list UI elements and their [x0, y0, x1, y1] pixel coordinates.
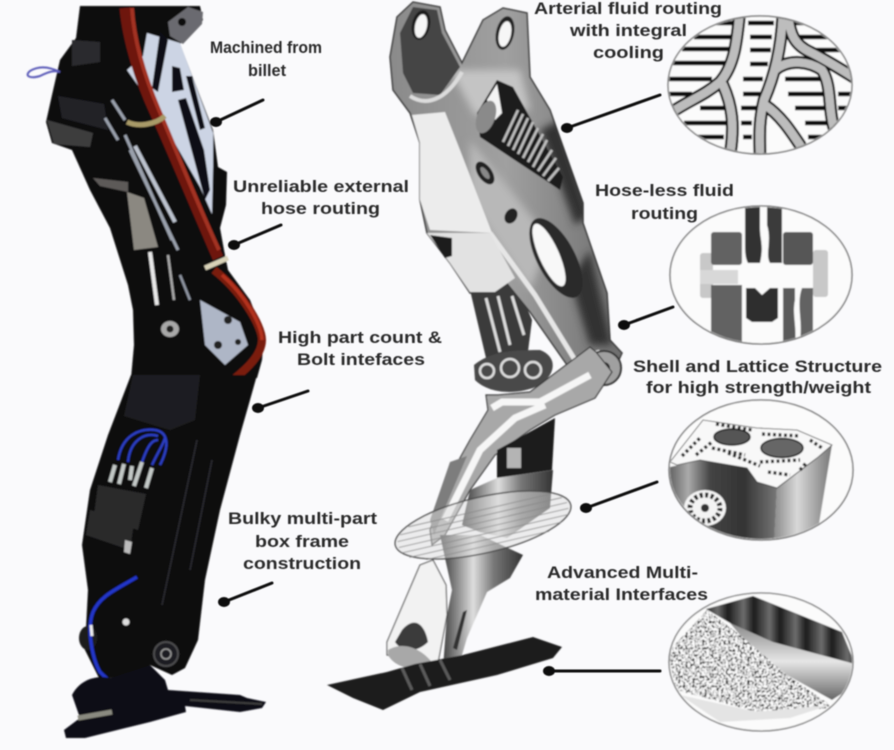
- lower white wedge: [387, 560, 447, 668]
- label: bulky multi-part box frame construction: box frame: [255, 533, 349, 551]
- soft pencil shading: [450, 70, 612, 345]
- small openings: [472, 158, 498, 188]
- label: high part count and bolt interfaces: High part count &: [278, 329, 442, 347]
- silver plate: [127, 33, 213, 214]
- detail: advanced multi-material interfaces: [668, 593, 855, 731]
- femur inner edge highlight: [490, 233, 600, 360]
- lower window: [519, 210, 593, 306]
- blue cable: [90, 577, 137, 712]
- ankle joint: [154, 642, 178, 666]
- valve blocks: [711, 232, 742, 265]
- tubular channels: [714, 429, 750, 445]
- label: arterial fluid routing: [534, 0, 722, 62]
- label: machined from billet: billet: [248, 62, 286, 80]
- light surface of femur: [412, 112, 492, 233]
- label: hose-less fluid routing: Hose-less fluid: [595, 182, 734, 200]
- label: hose-less fluid routing: routing: [631, 205, 698, 223]
- carbon fibre layer: [706, 596, 855, 664]
- horizontal coolant stripes: [668, 23, 853, 137]
- upper leg frame: [46, 6, 264, 378]
- smooth interface band: [730, 623, 855, 700]
- porous material: [668, 610, 835, 712]
- label: high part count and bolt interfaces: [278, 329, 442, 369]
- hose clamps: [127, 116, 165, 125]
- label: advanced multi-material interfaces: Advanced Multi-: [547, 564, 698, 582]
- right leg: additively manufactured leg drawing: [327, 2, 622, 710]
- label: machined from billet: Machined from: [210, 39, 322, 57]
- lower leg box frame: [80, 375, 257, 680]
- label: bulky multi-part box frame construction: construction: [243, 555, 361, 573]
- label: shell and lattice structure: Shell and Lattice Structure: [633, 358, 882, 376]
- shell side faces: [666, 460, 777, 545]
- knee hub: [587, 351, 621, 385]
- piston rods: [150, 252, 157, 305]
- label: high part count and bolt interfaces: Bolt intefaces: [297, 351, 425, 369]
- dark top socket: [400, 7, 460, 95]
- label: unreliable external hose routing: hose routing: [261, 200, 380, 218]
- label: unreliable external hose routing: [233, 178, 409, 218]
- underside block: [427, 233, 515, 292]
- actuator mechanism: [497, 418, 555, 478]
- lattice pores: [682, 424, 822, 475]
- label: arterial fluid routing: with integral: [569, 22, 687, 40]
- label: bulky multi-part box frame construction: Bulky multi-part: [228, 510, 378, 528]
- blue wires: [118, 430, 166, 465]
- artery branches: [672, 16, 852, 154]
- silver linkage rods: [105, 100, 178, 250]
- lower shaded edge: [680, 695, 830, 722]
- access window: [97, 417, 170, 488]
- silver connectors: [110, 462, 152, 488]
- plate slots: [152, 32, 210, 200]
- upper mounting holes: [409, 8, 433, 42]
- foot: [64, 665, 266, 738]
- actuator box: [462, 470, 553, 538]
- detail: arterial fluid routing: [668, 10, 858, 160]
- rear thigh fin: [430, 456, 467, 535]
- femur body: [390, 2, 622, 388]
- label: machined from billet: [210, 39, 322, 80]
- top lattice plate: [670, 420, 832, 488]
- knee arm: [430, 347, 612, 545]
- label: arterial fluid routing: Arterial fluid routing: [534, 0, 722, 18]
- foot blade: [327, 637, 562, 710]
- hatched section plane: [389, 477, 577, 573]
- grey actuator block: [127, 192, 158, 250]
- cooling ribs: [503, 110, 559, 181]
- detail: shell and lattice structure: [666, 400, 853, 545]
- knee struts behind femur: [470, 280, 532, 375]
- left leg: machined robotic leg photo: [28, 6, 266, 738]
- knee mechanism: [474, 350, 553, 392]
- label: bulky multi-part box frame construction: [228, 510, 378, 573]
- label: advanced multi-material interfaces: [535, 564, 708, 604]
- ribbed window: [477, 80, 563, 190]
- label: arterial fluid routing: cooling: [593, 44, 664, 62]
- dark motor housing: [47, 120, 93, 147]
- label: advanced multi-material interfaces: material Interfaces: [535, 586, 708, 604]
- label: hose-less fluid routing: [595, 182, 734, 223]
- upper mount bracket: [168, 7, 203, 44]
- lower shin: [440, 535, 523, 672]
- strut tube: [684, 490, 726, 526]
- callout pointers: [210, 95, 673, 676]
- frame segments: [86, 485, 146, 550]
- detail: hose-less fluid routing: [670, 205, 852, 345]
- small blue loop: [28, 67, 60, 77]
- label: shell and lattice structure: for high strength/weight: [646, 379, 872, 397]
- fluid channel: [738, 270, 803, 284]
- label: unreliable external hose routing: Unreliable external: [233, 178, 409, 196]
- valve side flanges: [700, 253, 713, 298]
- label: shell and lattice structure: [633, 358, 882, 397]
- knee hub: [161, 321, 179, 337]
- red hydraulic hoses: [125, 8, 218, 258]
